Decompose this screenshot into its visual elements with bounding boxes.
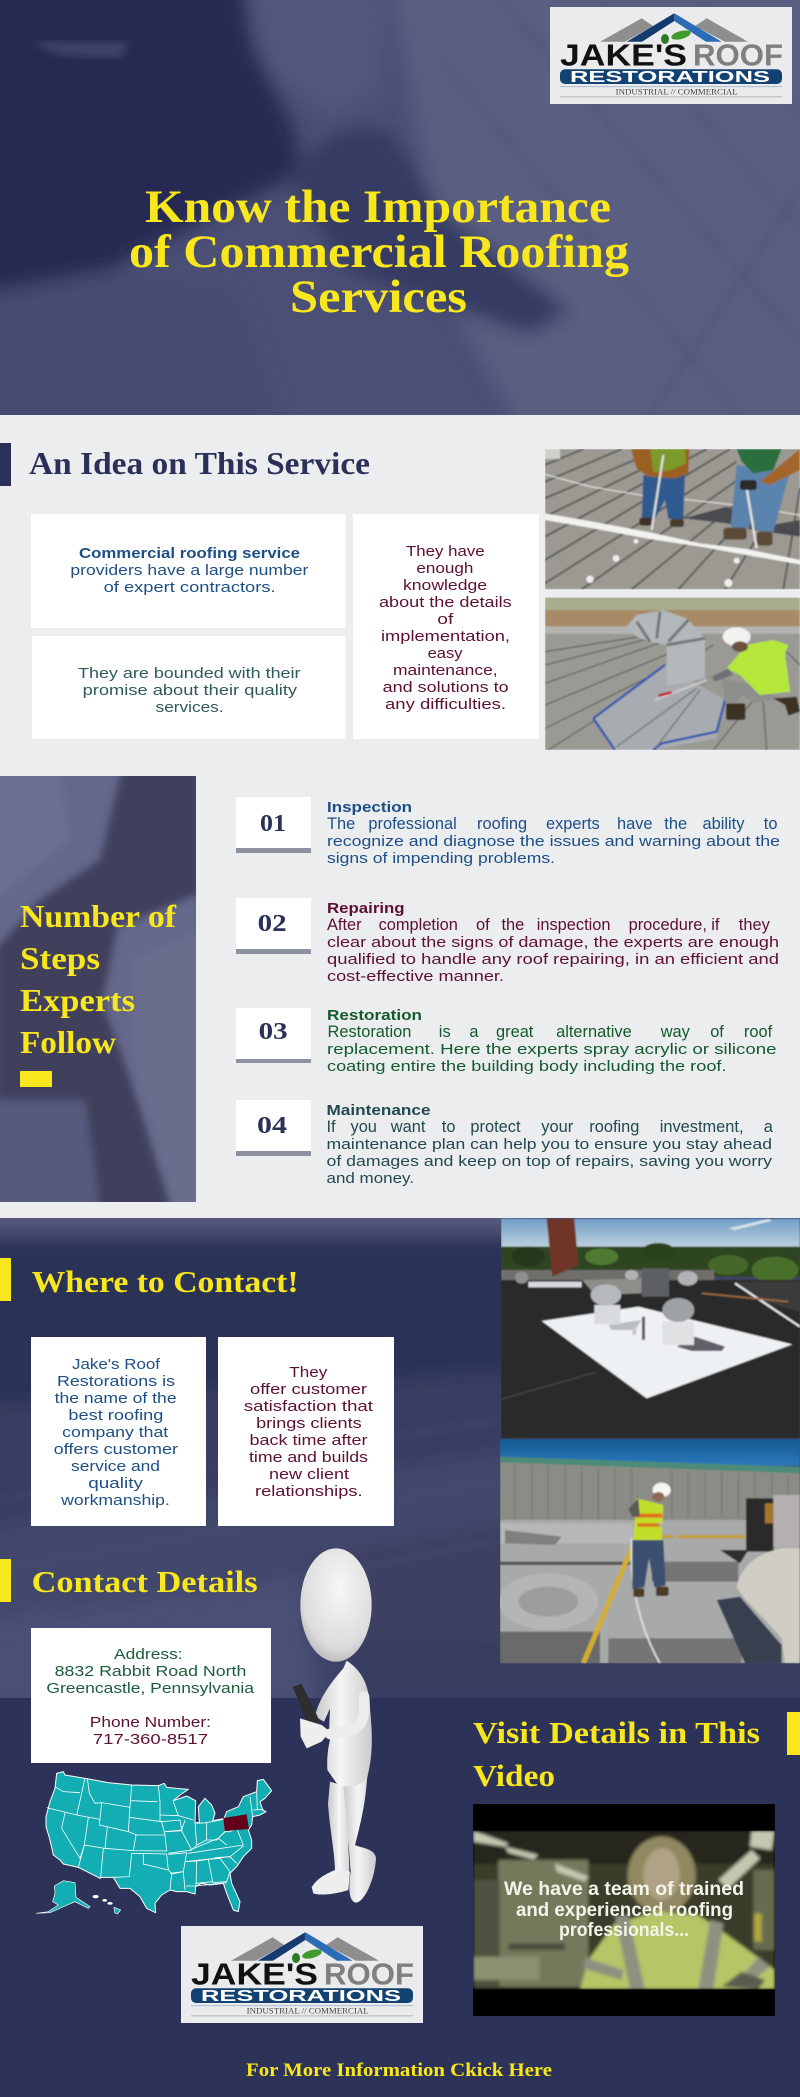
map: USA with Pennsylvania highlighted [36, 1772, 272, 1914]
text box: satisfaction: They [289, 1364, 328, 1381]
address card: Phone Number: [90, 1714, 211, 1731]
text box: company: workmanship. [60, 1492, 170, 1509]
step 01: inspection [236, 797, 780, 867]
text box: company: service and [71, 1458, 160, 1475]
title: Services [290, 271, 467, 323]
step text: The [327, 815, 360, 833]
step text: investment, [660, 1118, 748, 1136]
step text: inspection [537, 916, 615, 934]
logo: top [550, 7, 792, 104]
step text: great [496, 1023, 538, 1041]
step text: is [439, 1023, 455, 1041]
step 04: maintenance [236, 1100, 774, 1187]
step text: completion [379, 916, 462, 934]
text box: company: company that [62, 1424, 169, 1441]
address card: Greencastle, Pennsylvania [46, 1680, 255, 1697]
video caption [504, 1879, 744, 1941]
number badge [236, 1100, 311, 1156]
step text: Restoration [328, 1023, 416, 1041]
text box: knowledge: knowledge [403, 577, 487, 594]
text box: knowledge: implementation, [381, 628, 510, 645]
map: Pennsylvania [223, 1814, 249, 1831]
step text: roofing [589, 1118, 644, 1136]
hero banner [0, 0, 800, 430]
text box: satisfaction [218, 1337, 394, 1526]
step text: cost-effective manner. [327, 968, 504, 985]
heading [473, 1715, 760, 1793]
step text: of [476, 916, 494, 934]
logo: top: ROOF [693, 38, 783, 73]
address card: 717-360-8517 [93, 1731, 208, 1748]
step text: of [710, 1023, 728, 1041]
heading: An Idea on This Service [29, 445, 370, 481]
logo: bottom: JAKE'S [191, 1957, 318, 1992]
sidebar heading: Experts [20, 982, 135, 1018]
text box: company: offers customer [54, 1441, 178, 1458]
step text: alternative [556, 1023, 636, 1041]
contact background photo [0, 1205, 800, 1710]
step text: your [541, 1118, 578, 1136]
logo: top: RESTORATIONS [570, 69, 770, 86]
text box: knowledge: They have [406, 543, 485, 560]
step text: clear about the signs of damage, the experts are enough [327, 934, 779, 951]
step text [327, 799, 780, 867]
step text: experts [546, 815, 604, 833]
accent bar [787, 1712, 800, 1755]
text box: contractors: of expert contractors. [104, 579, 276, 596]
step 02: repairing [236, 898, 779, 985]
step text: a [469, 1023, 483, 1041]
step text: signs of impending problems. [327, 850, 555, 867]
text box: promise [32, 636, 346, 739]
step text: After [327, 916, 366, 934]
logo: bottom: RESTORATIONS [201, 1988, 401, 2005]
step text: if [711, 916, 724, 934]
text box: contractors: Commercial roofing service [79, 545, 300, 562]
number badge [236, 797, 311, 853]
sidebar heading: Steps [20, 940, 100, 976]
accent bar [0, 1559, 11, 1602]
accent bar [0, 1258, 11, 1301]
text box: knowledge: easy [428, 645, 463, 662]
step text [327, 900, 779, 985]
text box: satisfaction: offer customer [250, 1381, 367, 1398]
step text: If [326, 1118, 340, 1136]
step text: Restoration [327, 1007, 422, 1024]
number badge [236, 898, 311, 954]
logo: bottom: ROOF [324, 1957, 414, 1992]
illustration: white figure with phone [293, 1548, 376, 1903]
step text: maintenance plan can help you to ensure you stay ahead [326, 1136, 772, 1153]
number badge: 03 [259, 1019, 288, 1045]
step text: of damages and keep on top of repairs, saving you worry [326, 1153, 773, 1170]
step text: have [617, 815, 657, 833]
logo: bottom: INDUSTRIAL // COMMERCIAL [247, 2006, 369, 2015]
step text: to [442, 1118, 460, 1136]
video caption: and experienced roofing [516, 1900, 733, 1921]
address card: Address: [114, 1646, 183, 1663]
heading: Contact Details [32, 1564, 258, 1599]
step text: recognize and diagnose the issues and warning about the [327, 833, 780, 850]
sidebar background [0, 770, 200, 1210]
hero background photo [0, 0, 800, 430]
step text: way [660, 1023, 694, 1041]
text box: promise: They are bounded with their [78, 665, 300, 682]
step text: to [764, 815, 777, 833]
step text [327, 1007, 776, 1075]
step text: Inspection [327, 799, 412, 816]
text box: company: Jake's Roof [72, 1356, 161, 1373]
title [129, 181, 630, 323]
panel: video [473, 1712, 800, 2016]
heading: Where to Contact! [32, 1264, 299, 1299]
step text: want [390, 1118, 430, 1136]
step text: a [764, 1118, 774, 1136]
text box: satisfaction: new client [269, 1466, 350, 1483]
number badge: 04 [257, 1113, 287, 1139]
text box: knowledge [353, 514, 539, 739]
step text: ability [702, 815, 749, 833]
step text: professional [368, 815, 461, 833]
step text: you [350, 1118, 381, 1136]
map: contiguous states [46, 1772, 272, 1913]
logo: bottom [181, 1926, 423, 2023]
text box: company: the name of the [55, 1390, 177, 1407]
text box: knowledge: of [437, 611, 454, 628]
logo: top: INDUSTRIAL // COMMERCIAL [616, 87, 738, 96]
heading: Visit Details in This [473, 1715, 760, 1750]
logo: top: JAKE'S [560, 38, 687, 73]
accent bar [0, 443, 11, 486]
video thumbnail [473, 1804, 775, 2016]
title: of Commercial Roofing [129, 226, 630, 278]
panel: contact details [0, 1548, 376, 1914]
text box: knowledge: maintenance, [393, 662, 498, 679]
text box: knowledge: enough [416, 560, 473, 577]
map: Alaska and Hawaii [36, 1881, 121, 1914]
video caption: professionals... [559, 1920, 689, 1941]
address card [31, 1628, 271, 1763]
title: Know the Importance [145, 181, 611, 233]
photo: workers on metal roof [545, 449, 800, 589]
text box: knowledge: and solutions to [383, 679, 509, 696]
number badge: 01 [260, 811, 286, 837]
step text: protect [470, 1118, 525, 1136]
sidebar heading [20, 898, 176, 1060]
text box: satisfaction: relationships. [255, 1483, 363, 1500]
text box: contractors: providers have a large number [70, 562, 308, 579]
step text [326, 1102, 774, 1187]
step text: qualified to handle any roof repairing, in an efficient and [327, 951, 779, 968]
step text: roof [744, 1023, 773, 1041]
heading: Video [473, 1758, 555, 1793]
step text: Maintenance [326, 1102, 430, 1119]
sidebar accent [20, 1071, 52, 1087]
step text: the [502, 916, 529, 934]
sidebar heading: Number of [20, 898, 176, 934]
text box: knowledge: about the details [379, 594, 512, 611]
step text: coating entire the building body including the roof. [327, 1058, 726, 1075]
text box: promise: services. [156, 699, 224, 716]
text box: company: Restorations is [57, 1373, 175, 1390]
text box: company: quality [88, 1475, 144, 1492]
number badge [236, 1008, 311, 1063]
sidebar heading: Follow [20, 1024, 116, 1060]
address card: 8832 Rabbit Road North [55, 1663, 246, 1680]
panel: number of steps sidebar [0, 770, 200, 1210]
panel: footer background [0, 1698, 800, 2097]
step text: the [664, 815, 692, 833]
video caption: We have a team of trained [504, 1879, 744, 1900]
step text: they [739, 916, 771, 934]
text box: satisfaction: back time after [250, 1432, 368, 1449]
photo: worker sealing duct [545, 597, 800, 750]
panel: where to contact [0, 1205, 800, 1710]
text box: company: best roofing [68, 1407, 163, 1424]
step text: roofing [477, 815, 532, 833]
text box: satisfaction: time and builds [249, 1449, 368, 1466]
text box: promise: promise about their quality [83, 682, 298, 699]
text box: contractors [31, 514, 346, 628]
step 03: restoration [236, 1007, 776, 1075]
step text: replacement. Here the experts spray acrylic or silicone [327, 1041, 776, 1058]
number badge: 02 [258, 911, 287, 937]
step text: procedure, [629, 916, 712, 934]
text box: satisfaction: brings clients [256, 1415, 362, 1432]
text box: knowledge: any difficulties. [385, 696, 506, 713]
text box: satisfaction: satisfaction that [244, 1398, 374, 1415]
footer link: For More Information Ckick Here [246, 2060, 552, 2081]
photo: white patch on black roof [501, 1218, 800, 1438]
text box: company [31, 1337, 206, 1526]
step text: Repairing [327, 900, 405, 917]
photo: worker coating flat roof [498, 1439, 800, 1663]
step text: and money. [326, 1170, 414, 1187]
panel: an idea on this service [0, 443, 800, 750]
